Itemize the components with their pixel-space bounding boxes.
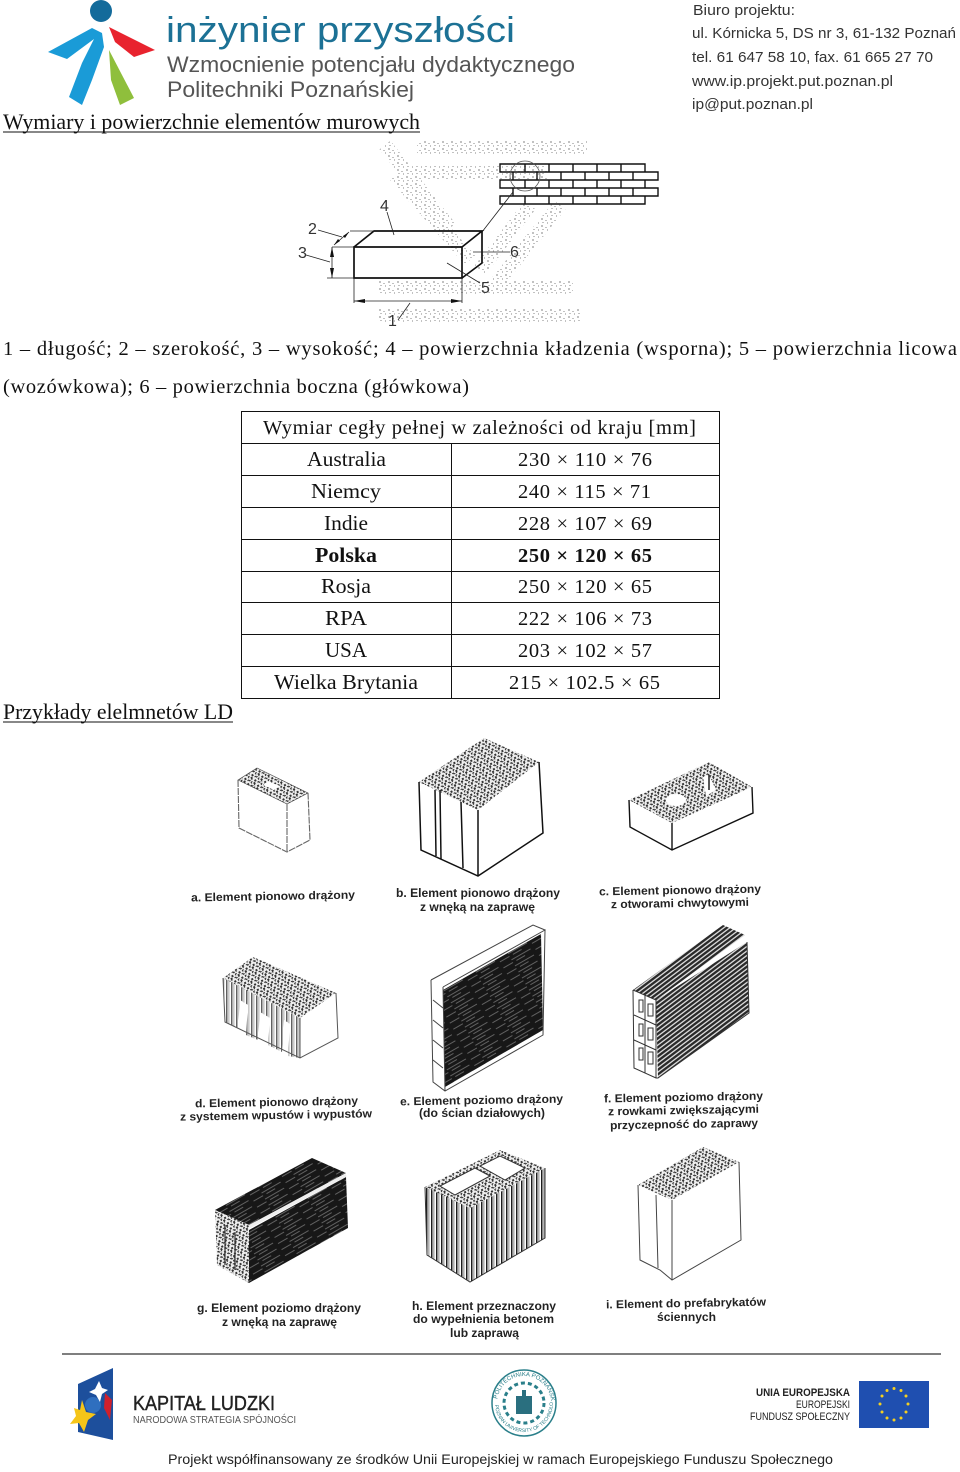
logo: Kapitał Ludzki (70, 1368, 296, 1440)
table rows: Australia (307, 447, 387, 471)
label h: h. Element przeznaczony (412, 1301, 557, 1313)
label a: a. Element pionowo drążony (191, 890, 356, 904)
element d (180, 957, 372, 1124)
logo subtitle: Wzmocnienie potencjału dydaktycznego (167, 52, 575, 77)
table rows: 215 × 102.5 × 65 (509, 672, 660, 694)
emblem: Poznan University of Technology: POLITECHNIKA POZNAŃSKA (493, 1372, 555, 1401)
element b (396, 738, 561, 914)
logo: European Union (750, 1381, 929, 1428)
element g (197, 1158, 362, 1329)
element i (606, 1147, 766, 1324)
label b (396, 888, 561, 914)
element c (599, 762, 762, 911)
diagram: brick dimensions in a wall (298, 145, 658, 330)
logo: inżynier przyszłości (48, 0, 575, 105)
callout numbers: 4 (380, 198, 389, 215)
logo: Kapitał Ludzki: KAPITAŁ LUDZKI (133, 1393, 275, 1415)
label i: ściennych (657, 1312, 716, 1324)
table rows: 222 × 106 × 73 (518, 608, 652, 630)
label g (197, 1303, 362, 1329)
label e: (do ścian działowych) (419, 1108, 545, 1120)
table rows: RPA (325, 606, 368, 630)
icon: EU flag (859, 1381, 929, 1428)
label e (400, 1094, 564, 1120)
project office contact block (691, 2, 956, 113)
label d (180, 1096, 372, 1124)
label f: z rowkami zwiększającymi (608, 1104, 759, 1118)
project office contact block: www.ip.projekt.put.poznan.pl (691, 73, 893, 90)
callout numbers: 6 (510, 244, 519, 261)
label c: z otworami chwytowymi (611, 897, 749, 911)
table rows: Polska (315, 543, 378, 567)
label i: i. Element do prefabrykatów (606, 1297, 766, 1311)
logo: Kapitał Ludzki: NARODOWA STRATEGIA SPÓJNOŚCI (133, 1413, 296, 1426)
emblem: Poznan University of Technology: POZNAN UNIVERSITY OF TECHNOLOGY (495, 1402, 553, 1432)
table: full brick size by country (241, 412, 720, 699)
label g: z wnęką na zaprawę (222, 1317, 337, 1329)
label d: d. Element pionowo drążony (195, 1096, 359, 1110)
logo: European Union: EUROPEJSKI (796, 1399, 850, 1411)
table header: Wymiar cegły pełnej w zależności od kraju [mm] (263, 417, 696, 439)
label c: c. Element pionowo drążony (599, 884, 762, 898)
table rows: Rosja (321, 574, 372, 598)
callout numbers: 5 (481, 280, 490, 297)
callout numbers: 1 (388, 313, 397, 330)
project office contact block: ip@put.poznan.pl (692, 96, 813, 113)
heading: examples of LD elements: Przykłady elelmnetów LD (3, 699, 233, 724)
callout numbers (298, 198, 519, 330)
dimension lines (306, 212, 510, 320)
legend text for the brick diagram: (wozówkowa); 6 – powierzchnia boczna (główkowa) (3, 376, 469, 398)
table rows: 203 × 102 × 57 (518, 640, 652, 662)
label e: e. Element poziomo drążony (400, 1094, 564, 1108)
legend text for the brick diagram (3, 338, 957, 398)
label f: przyczepność do zaprawy (610, 1118, 759, 1132)
label f (604, 1091, 764, 1132)
label c (599, 884, 762, 911)
table rows: 230 × 110 × 76 (518, 449, 652, 471)
element e (400, 925, 564, 1120)
table rows: 228 × 107 × 69 (518, 513, 652, 535)
element h (412, 1150, 557, 1340)
label h (412, 1301, 557, 1340)
icon: stars flag (70, 1368, 113, 1440)
label i (606, 1297, 766, 1324)
logo name: inżynier przyszłości (166, 9, 515, 50)
table rows: 250 × 120 × 65 (518, 545, 652, 567)
label h: lub zaprawą (450, 1328, 520, 1340)
table rows: 240 × 115 × 71 (518, 481, 651, 503)
table rows: USA (325, 638, 368, 662)
label g: g. Element poziomo drążony (197, 1303, 362, 1315)
table rows (274, 447, 660, 694)
table rows: 250 × 120 × 65 (518, 576, 652, 598)
element f (604, 925, 764, 1132)
logo: European Union: UNIA EUROPEJSKA (756, 1387, 850, 1399)
table rows: Wielka Brytania (274, 670, 419, 694)
label h: do wypełnienia betonem (413, 1314, 554, 1326)
project office contact block: Biuro projektu: (693, 2, 795, 19)
table rows: Indie (324, 511, 368, 535)
brick wall (500, 164, 658, 204)
callout numbers: 3 (298, 245, 307, 262)
project office contact block: tel. 61 647 58 10, fax. 61 665 27 70 (692, 49, 933, 66)
logo: European Union: FUNDUSZ SPOŁECZNY (750, 1411, 851, 1423)
footer funding note: Projekt współfinansowany ze środków Unii Europejskiej w ramach Europejskiego Funduszu Społecznego (168, 1451, 833, 1467)
single brick (354, 231, 482, 278)
label d: z systemem wpustów i wypustów (180, 1108, 372, 1124)
table rows: Niemcy (311, 479, 382, 503)
heading: dimensions and surfaces: Wymiary i powierzchnie elementów murowych (3, 109, 420, 134)
label f: f. Element poziomo drążony (604, 1091, 764, 1105)
label b: b. Element pionowo drążony (396, 888, 561, 900)
label b: z wnęką na zaprawę (420, 902, 535, 914)
project office contact block: ul. Kórnicka 5, DS nr 3, 61-132 Poznań (692, 25, 956, 42)
emblem: Poznan University of Technology (491, 1369, 557, 1437)
logo: inżynier przyszłości: Politechniki Poznańskiej (167, 77, 414, 102)
element a (191, 768, 356, 904)
legend text for the brick diagram: 1 – długość; 2 – szerokość, 3 – wysokość; 4 – powierzchnia kładzenia (wsporna); 5 – powierzchnia licowa (3, 338, 957, 360)
icon: figure (48, 0, 155, 105)
callout numbers: 2 (308, 221, 317, 238)
